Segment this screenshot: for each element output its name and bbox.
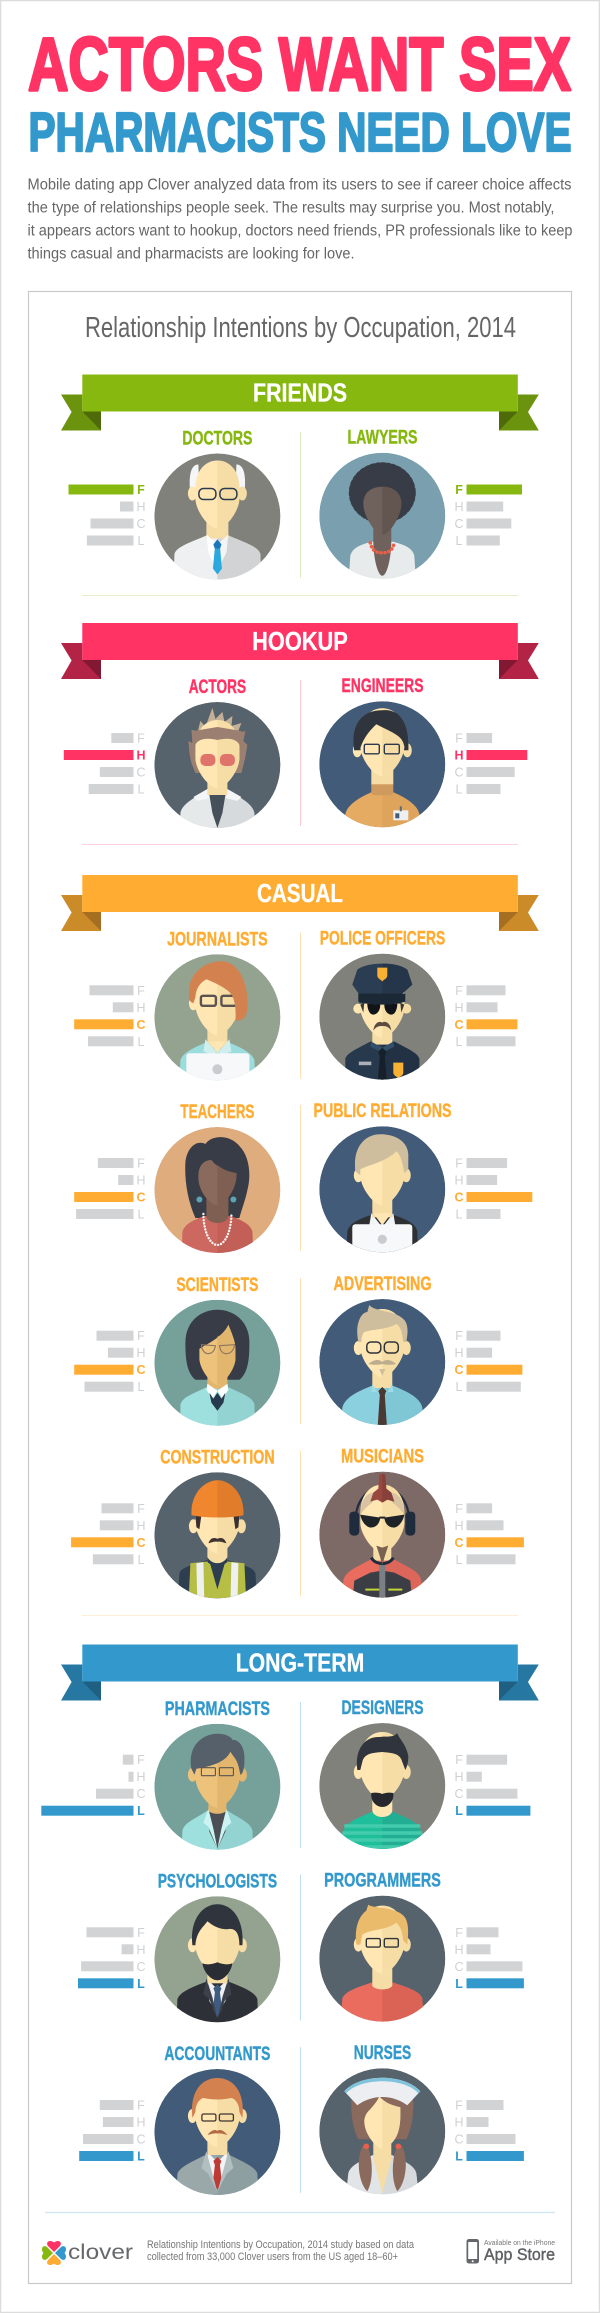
bars: doctors [68, 483, 146, 548]
label: accountants: ACCOUNTANTS [164, 2043, 270, 2065]
profile: lawyers [319, 427, 522, 586]
bars: psychologists [78, 1926, 146, 1991]
profile: police officers [319, 928, 517, 1087]
ribbon: casual: CASUAL [257, 878, 343, 908]
bars: programmers [454, 1926, 524, 1991]
icon: iphone [466, 2239, 479, 2264]
label: construction: CONSTRUCTION [160, 1446, 275, 1468]
bars: pharmacists: H [136, 1770, 146, 1784]
bars: scientists [74, 1329, 146, 1394]
ribbon: long-term: LONG-TERM [236, 1648, 364, 1678]
bars: accountants [79, 2098, 146, 2164]
footer: source note: collected from 33,000 Clover users from the US aged 18–60+ [147, 2251, 398, 2263]
bars: psychologists: C [136, 1960, 146, 1974]
bars: engineers: H [454, 748, 464, 762]
label: psychologists: PSYCHOLOGISTS [158, 1870, 277, 1892]
bars: teachers: C [136, 1190, 146, 1204]
ribbon: long-term [61, 1644, 539, 1700]
avatar: pharmacist [154, 1724, 280, 1857]
bars: construction: H [136, 1519, 146, 1533]
bars: lawyers: C [454, 517, 464, 531]
bars: engineers: L [456, 782, 463, 796]
bars: construction: F [137, 1502, 145, 1516]
bars: scientists: C [136, 1363, 146, 1377]
avatar: nurse [319, 2068, 445, 2201]
bars: police officers [454, 984, 517, 1049]
avatar: accountant [154, 2069, 280, 2202]
bars: musicians: F [455, 1502, 463, 1516]
bars: programmers: F [455, 1926, 463, 1940]
label: advertising: ADVERTISING [334, 1273, 432, 1295]
intro paragraph [28, 176, 572, 262]
bars: designers: L [455, 1804, 463, 1818]
profile: construction [71, 1446, 280, 1605]
label: nurses: NURSES [354, 2042, 411, 2064]
bars: pharmacists: C [136, 1787, 146, 1801]
bars: designers: H [454, 1770, 464, 1784]
ribbon: casual [61, 875, 539, 931]
footer: app store badge: App Store [484, 2246, 555, 2264]
bars: journalists: H [136, 1001, 146, 1015]
footer: app store badge [466, 2239, 555, 2264]
ribbon: hookup: HOOKUP [252, 626, 348, 656]
profile: nurses [319, 2042, 524, 2201]
bars: advertising: H [454, 1346, 464, 1360]
profile: accountants [79, 2043, 280, 2202]
ribbon: friends [61, 374, 539, 430]
avatar: musician [319, 1472, 445, 1605]
label: journalists: JOURNALISTS [167, 928, 268, 950]
label: police officers: POLICE OFFICERS [320, 928, 445, 950]
bars: public relations [454, 1156, 532, 1222]
bars: teachers: F [137, 1156, 145, 1170]
bars: pharmacists: F [137, 1753, 145, 1767]
ribbon: friends: FRIENDS [253, 378, 347, 408]
label: teachers: TEACHERS [180, 1101, 254, 1123]
bars: scientists: F [137, 1329, 145, 1343]
bars: advertising: L [456, 1380, 463, 1394]
label: doctors: DOCTORS [182, 428, 252, 450]
bars: musicians [454, 1502, 524, 1567]
label: designers: DESIGNERS [342, 1697, 424, 1719]
profile: pharmacists [41, 1698, 280, 1857]
avatar: doctor [154, 454, 280, 586]
bars: teachers: L [138, 1208, 145, 1222]
bars: lawyers: F [455, 483, 463, 497]
bars: accountants: F [137, 2098, 145, 2112]
bars: construction [71, 1502, 146, 1567]
bars: accountants: L [137, 2150, 145, 2164]
footer: app store badge: Available on the iPhone [484, 2240, 555, 2247]
bars: teachers: H [136, 1174, 146, 1188]
bars: advertising: C [454, 1363, 464, 1377]
bars: psychologists: L [137, 1977, 145, 1991]
profile: psychologists [78, 1870, 280, 2029]
bars: lawyers: H [454, 500, 464, 514]
bars: musicians: H [454, 1519, 464, 1533]
bars: programmers: H [454, 1943, 464, 1957]
bars: nurses: H [454, 2116, 464, 2130]
avatar: scientist [154, 1300, 280, 1433]
avatar: journalist [154, 954, 280, 1087]
label: lawyers: LAWYERS [348, 427, 418, 449]
bars: public relations: C [454, 1190, 464, 1204]
avatar: public relations [319, 1126, 445, 1259]
bars: musicians: C [454, 1536, 464, 1550]
label: public relations: PUBLIC RELATIONS [314, 1100, 452, 1122]
avatar: programmer [319, 1896, 445, 2029]
bars: doctors: C [136, 517, 146, 531]
panel: chart frame [28, 292, 572, 2284]
footer: clover logo [42, 2241, 133, 2265]
bars: doctors: L [138, 534, 145, 548]
label: actors: ACTORS [189, 676, 246, 698]
bars: journalists [74, 984, 146, 1049]
bars: police officers: H [454, 1001, 464, 1015]
label: pharmacists: PHARMACISTS [165, 1698, 270, 1720]
profile: journalists [74, 928, 280, 1087]
bars: doctors: F [137, 483, 145, 497]
bars: designers: F [455, 1753, 463, 1767]
profile: designers [319, 1697, 530, 1856]
bars: nurses: C [454, 2132, 464, 2146]
profile: actors [64, 676, 280, 835]
bars: nurses [454, 2098, 524, 2164]
bars: scientists: H [136, 1346, 146, 1360]
bars: musicians: L [456, 1553, 463, 1567]
bars: police officers: C [454, 1018, 464, 1032]
bars: psychologists: F [137, 1926, 145, 1940]
bars: police officers: L [456, 1035, 463, 1049]
bars: advertising: F [455, 1329, 463, 1343]
bars: public relations: H [454, 1174, 464, 1188]
footer: source note [147, 2239, 415, 2263]
avatar: advertising [319, 1299, 445, 1432]
bars: programmers: C [454, 1960, 464, 1974]
profile: musicians [319, 1446, 524, 1605]
intro paragraph: the type of relationships people seek. The results may surprise you. Most notably, [28, 200, 554, 216]
label: programmers: PROGRAMMERS [324, 1870, 441, 1892]
bars: programmers: L [455, 1977, 463, 1991]
avatar: actor [154, 702, 280, 835]
wordmark: clover: clover [68, 2241, 133, 2264]
bars: nurses: F [455, 2098, 463, 2112]
bars: teachers [74, 1156, 146, 1222]
bars: accountants: C [136, 2132, 146, 2146]
icon: clover hearts [42, 2241, 66, 2265]
bars: police officers: F [455, 984, 463, 998]
avatar: lawyer [319, 453, 445, 586]
bars: pharmacists: L [137, 1804, 145, 1818]
profile: doctors [68, 428, 280, 586]
avatar: teacher [154, 1127, 280, 1260]
profile: public relations [314, 1100, 532, 1259]
bars: construction: L [138, 1553, 145, 1567]
bars: actors: F [137, 732, 145, 746]
profile: teachers [74, 1101, 280, 1260]
bars: journalists: F [137, 984, 145, 998]
bars: actors: L [138, 782, 145, 796]
bars: engineers [454, 732, 527, 796]
bars: pharmacists [41, 1753, 146, 1818]
profile: advertising [319, 1273, 522, 1432]
intro paragraph: it appears actors want to hookup, doctors need friends, PR professionals like to keep [28, 222, 572, 240]
label: musicians: MUSICIANS [341, 1446, 424, 1468]
bars: doctors: H [136, 500, 146, 514]
bars: actors: C [136, 766, 146, 780]
label: scientists: SCIENTISTS [176, 1274, 258, 1296]
ribbon: hookup [61, 623, 539, 679]
bars: lawyers: L [456, 534, 463, 548]
intro paragraph: things casual and pharmacists are looking for love. [28, 246, 354, 262]
bars: actors: H [136, 748, 146, 762]
profile: scientists [74, 1274, 280, 1433]
bars: nurses: L [455, 2150, 463, 2164]
bars: engineers: C [454, 766, 464, 780]
bars: public relations: F [455, 1156, 463, 1170]
avatar: engineer [319, 701, 445, 834]
bars: scientists: L [138, 1380, 145, 1394]
bars: designers [454, 1753, 530, 1818]
intro paragraph: Mobile dating app Clover analyzed data from its users to see if career choice affects [28, 176, 572, 194]
footer: source note: Relationship Intentions by Occupation, 2014 study based on data [147, 2239, 415, 2251]
bars: accountants: H [136, 2116, 146, 2130]
bars: advertising [454, 1329, 522, 1394]
avatar: designer [319, 1723, 445, 1856]
bars: journalists: L [138, 1035, 145, 1049]
profile: engineers [319, 675, 527, 834]
bars: public relations: L [456, 1208, 463, 1222]
bars: engineers: F [455, 732, 463, 746]
bars: psychologists: H [136, 1943, 146, 1957]
profile: programmers [319, 1870, 524, 2029]
avatar: psychologist [154, 1896, 280, 2029]
avatar: police officer [319, 954, 445, 1087]
avatar: construction worker [154, 1472, 280, 1605]
bars: journalists: C [136, 1018, 146, 1032]
label: engineers: ENGINEERS [342, 675, 424, 697]
bars: construction: C [136, 1536, 146, 1550]
bars: designers: C [454, 1787, 464, 1801]
bars: lawyers [454, 483, 522, 548]
bars: actors [64, 732, 146, 796]
